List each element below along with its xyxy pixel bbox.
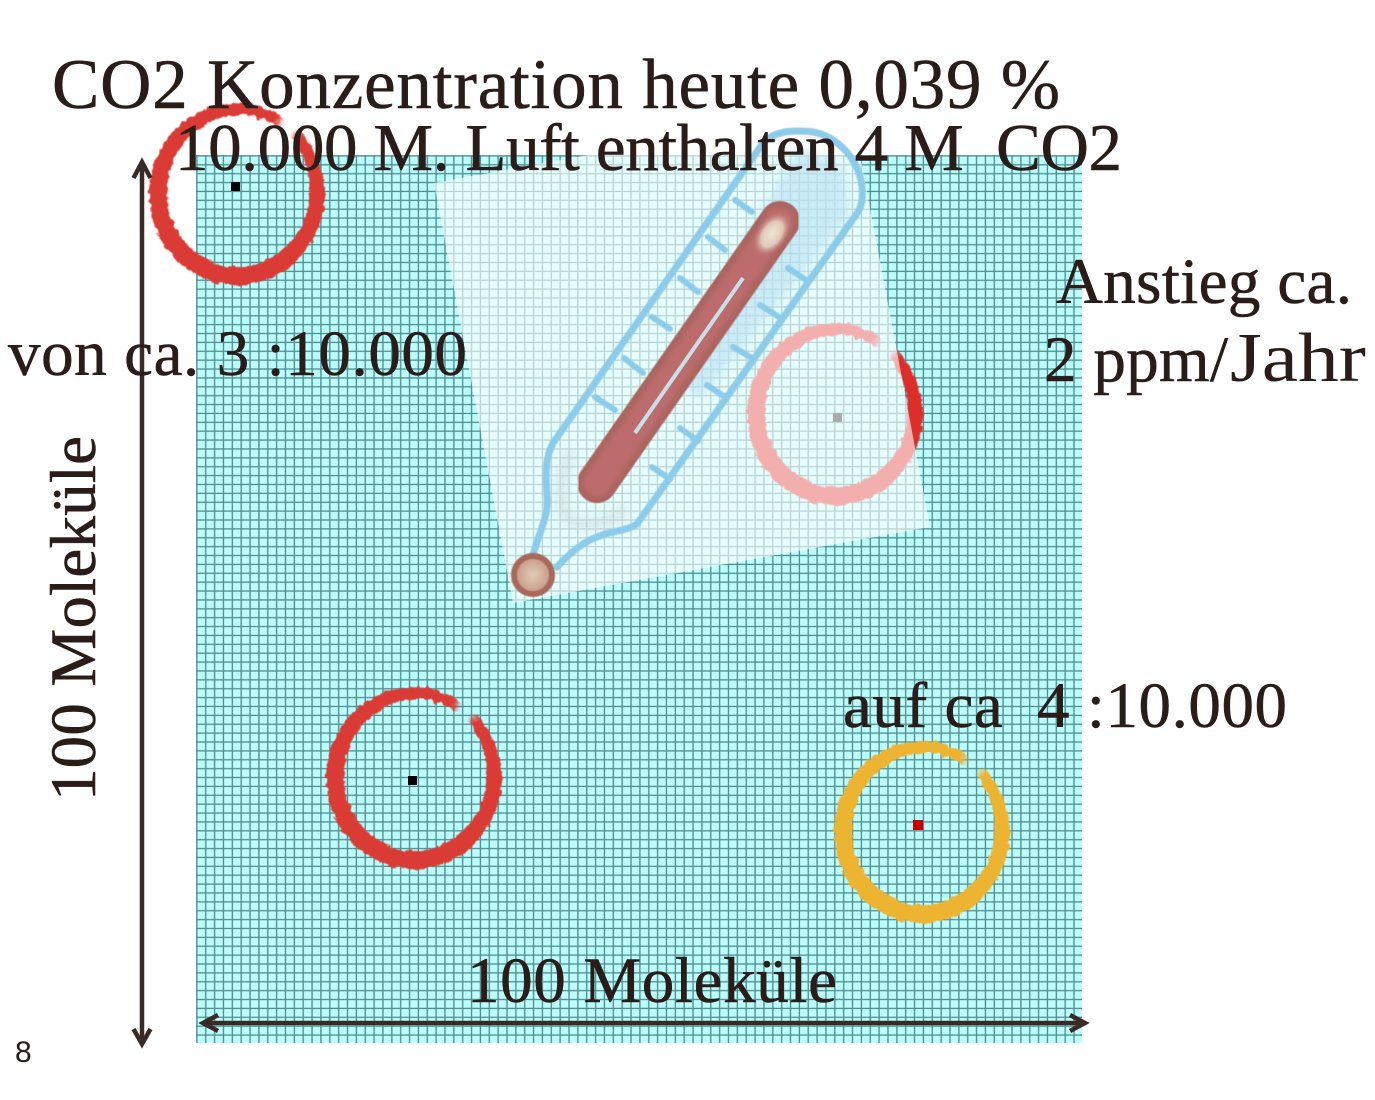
arrow: vertical (134, 162, 150, 1044)
label: vertical axis: 100 Moleküle (38, 436, 110, 801)
icon: thermometer (514, 131, 862, 594)
grid of 10000 molecules (196, 155, 1082, 1043)
ring: yellow (834, 741, 1010, 923)
ring: red bottom left (326, 687, 502, 869)
molecule dot: black (408, 776, 417, 785)
label: annual rise: Jahr (1230, 320, 1366, 397)
thermometer bulb (514, 556, 552, 594)
ring: red top left (149, 103, 325, 285)
label: target ratio: auf ca 4 :10.000 (843, 670, 1287, 742)
label: annual rise: 2 ppm/ (1044, 324, 1229, 396)
thermometer outline (533, 131, 862, 567)
marked molecule: top left (149, 103, 325, 285)
thermometer glass fill (670, 145, 850, 400)
label: annual rise: Anstieg ca. (1056, 246, 1352, 318)
label: horizontal axis: 100 Moleküle (467, 945, 837, 1017)
mercury highlight glow (744, 204, 800, 264)
label: annual rise (1044, 246, 1366, 397)
thermometer smudge (561, 450, 628, 524)
translucent panel behind thermometer (434, 107, 930, 603)
label: starting ratio: von ca. 3 :10.000 (8, 318, 467, 390)
thermometer tick marks (595, 200, 806, 479)
molecule dot: under panel (833, 413, 842, 422)
title: CO2 Konzentration heute 0,039 % (52, 46, 1060, 124)
subtitle: 10.000 M. Luft enthalten 4 M CO2 (175, 111, 1122, 185)
marked molecule: under panel (747, 323, 923, 505)
molecule dot: red (913, 820, 923, 830)
ring: faded red (747, 323, 923, 505)
mercury column (597, 221, 780, 483)
arrow: horizontal (203, 1015, 1085, 1031)
marked molecule: bottom left (326, 687, 502, 869)
page number: 8 (15, 1036, 32, 1069)
marked molecule: bottom right (834, 741, 1010, 923)
molecule dot: black (231, 182, 240, 191)
mercury highlight line (635, 278, 743, 433)
